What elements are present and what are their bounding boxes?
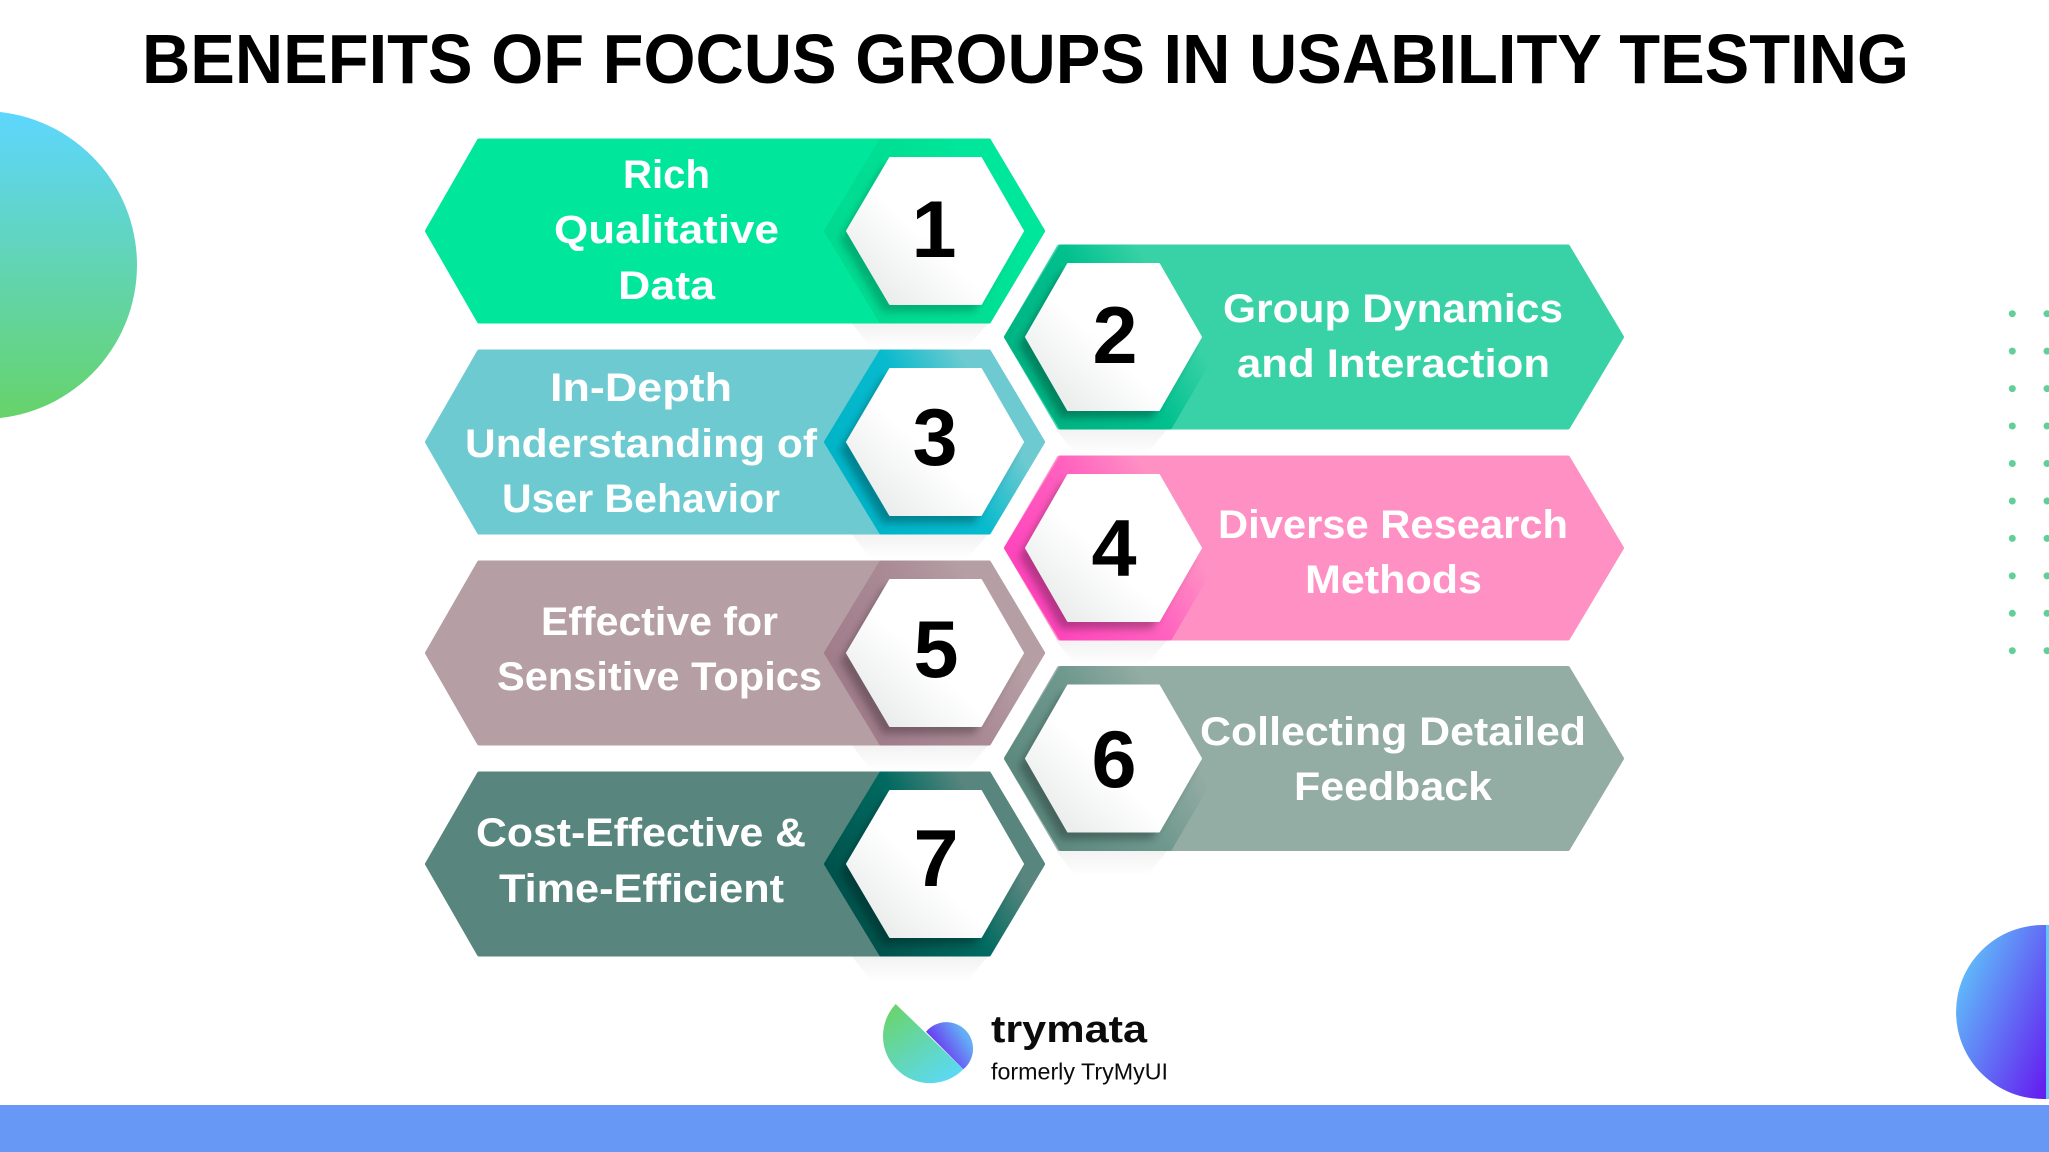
item 2: Group Dynamics and Interaction [1006,246,1622,455]
white hexagon 5 [847,580,1023,726]
number 5: 5 [913,605,959,695]
white hexagon 1 [847,158,1023,304]
label 7: Time-Efficient [499,867,784,911]
number 7: 7 [913,814,959,904]
number 6: 6 [1091,715,1137,805]
decorative circle: top left [0,111,137,419]
number 3: 3 [912,393,958,483]
label 1: Qualitative [554,208,779,252]
label 2: and Interaction [1237,342,1550,386]
label 5: Effective for [541,600,778,644]
white hexagon 7 [847,791,1023,937]
label 2: Group Dynamics [1223,287,1563,331]
label 1: Data [618,264,716,308]
decorative half circle: bottom right [1956,925,2049,1099]
item 4: Diverse Research Methods [1006,458,1622,666]
logo tagline: formerly TryMyUI [991,1058,1168,1084]
white hexagon 3 [847,369,1023,515]
bottom bar [0,1105,2049,1152]
number 1: 1 [911,185,957,275]
item 6: Collecting Detailed Feedback [1006,668,1622,876]
item 7: Cost-Effective and Time-Efficient [427,774,1043,982]
icon: logo mark [883,1004,973,1083]
number 4: 4 [1091,504,1137,594]
dot grid: right edge [2009,310,2049,654]
label 6: Feedback [1294,765,1493,809]
label 4: Methods [1305,558,1482,602]
label 7: Cost-Effective & [476,811,806,855]
item 1: Rich Qualitative Data [427,140,1043,349]
number 2: 2 [1092,291,1138,381]
white hexagon 4 [1026,475,1201,621]
label 3: In-Depth [550,366,732,410]
label 3: Understanding of [465,422,818,466]
label 3: User Behavior [502,477,780,521]
label 6: Collecting Detailed [1200,710,1586,754]
logo: trymata [883,1004,1168,1084]
label 1: Rich [623,153,710,197]
title: BENEFITS OF FOCUS GROUPS IN USABILITY TESTING [142,20,1909,98]
label 5: Sensitive Topics [497,655,822,699]
item 5: Effective for Sensitive Topics [427,562,1043,771]
item 3: In-Depth Understanding of User Behavior [427,352,1043,560]
white hexagon 2 [1026,264,1201,410]
logo wordmark: trymata [991,1009,1148,1051]
white hexagon 6 [1026,686,1201,832]
label 4: Diverse Research [1218,503,1568,547]
